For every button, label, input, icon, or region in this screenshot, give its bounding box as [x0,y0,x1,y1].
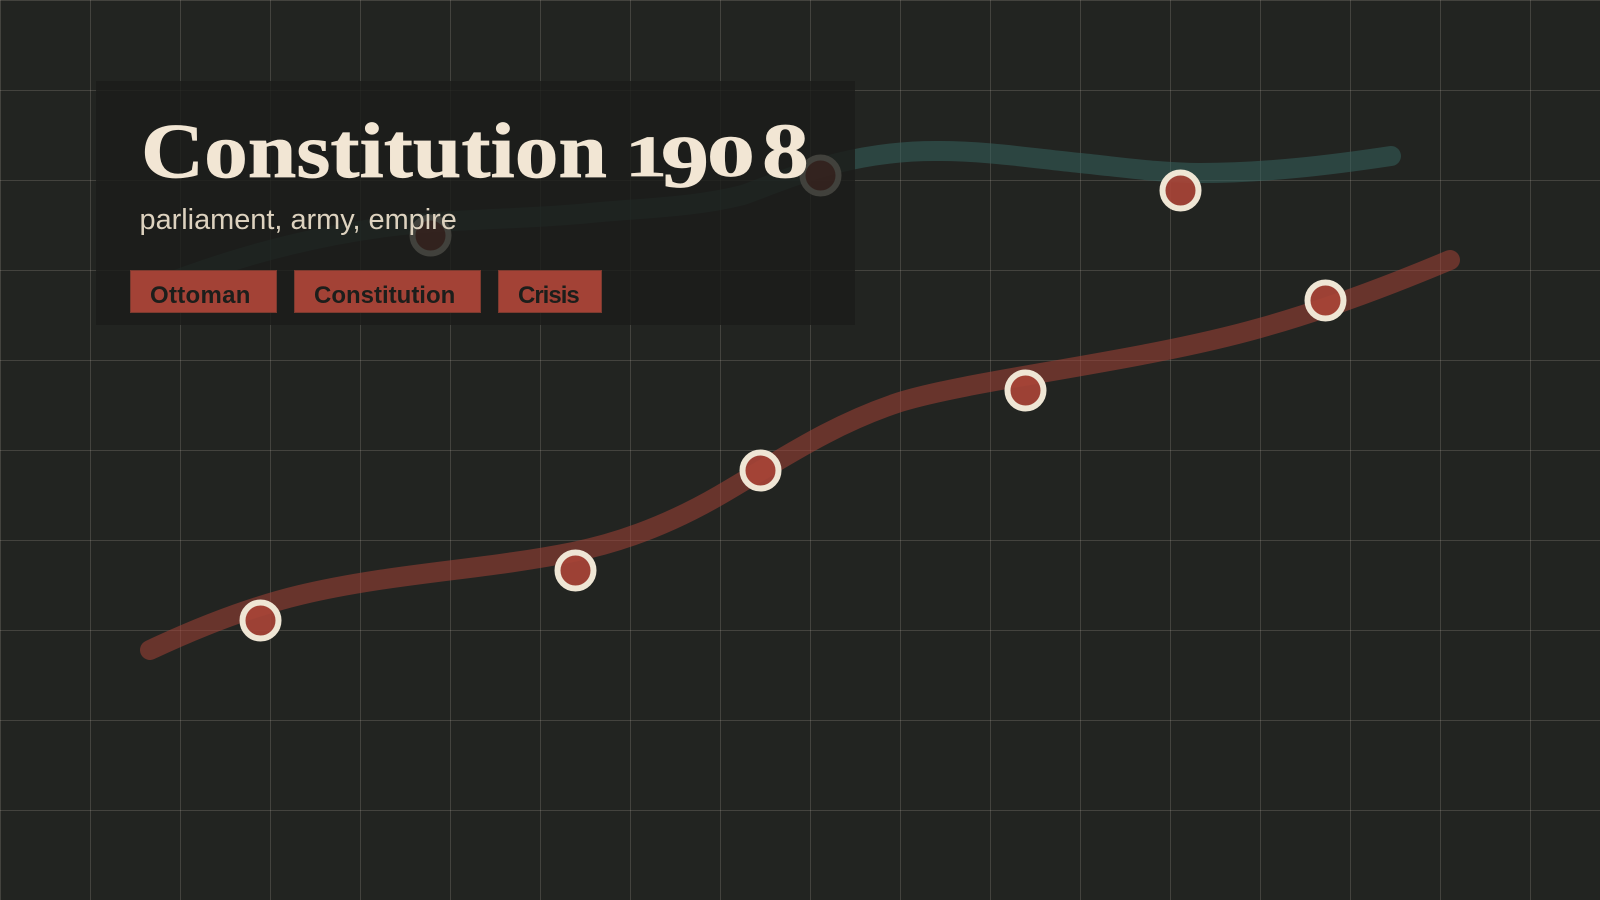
title: 0 [707,124,755,189]
tag: Constitution: Constitution [314,282,455,309]
title: 1 [625,124,667,189]
title: 8 [762,107,808,194]
tag: Constitution [294,270,481,313]
tag: Crisis: Crisis [518,282,579,309]
title [140,107,808,204]
red trend line [150,260,1450,650]
subtitle: parliament, army, empire [140,204,457,236]
tag: Ottoman: Ottoman [150,282,251,309]
teal trend line [150,151,1391,290]
teal series markers [412,158,1198,254]
panel: title card background [96,81,855,325]
red series markers [242,282,1344,638]
tag: Crisis [498,270,602,313]
title: Constitution [140,107,607,194]
tag: Ottoman [130,270,277,313]
title: 9 [661,122,709,204]
